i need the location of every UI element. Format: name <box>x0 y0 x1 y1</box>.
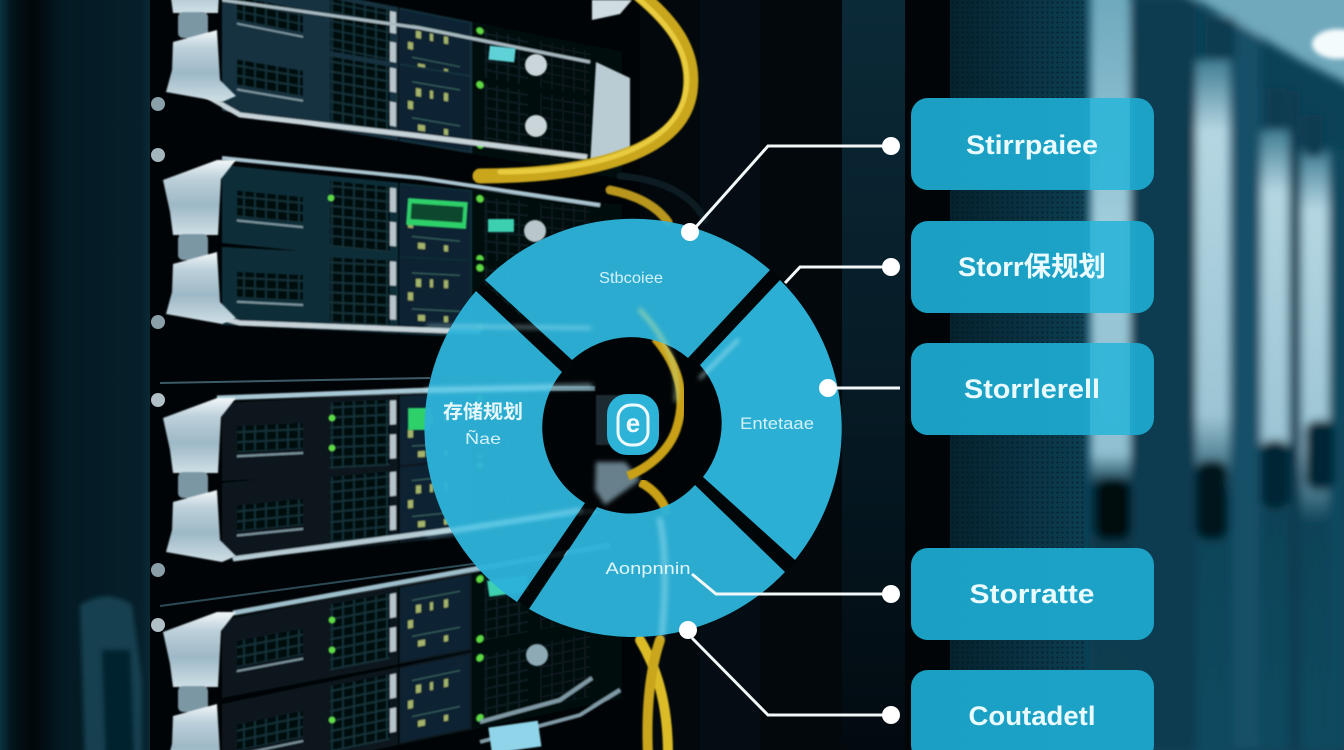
label box 3 <box>911 343 1154 435</box>
segment: top <box>485 219 770 360</box>
diagram: central segmented ring <box>424 219 842 637</box>
segment: bottom <box>529 485 785 637</box>
yellow network cables <box>480 0 705 750</box>
label box 5 <box>911 670 1154 750</box>
server units: light mounting brackets <box>163 0 632 750</box>
panel: blurred server aisle background <box>1086 0 1344 750</box>
server units: rack faces <box>205 0 622 750</box>
segment label: left chinese: 存储规划 <box>443 401 523 423</box>
label box 2: Storr保规划 <box>958 252 1106 282</box>
center icon: e <box>626 408 640 438</box>
connector 2 <box>785 267 891 283</box>
segment label: left small: Ñae <box>465 428 501 448</box>
center dark disc <box>540 334 724 518</box>
segment: left <box>424 291 585 602</box>
segment label: bottom: Aonpnnin <box>606 559 690 578</box>
connector 1 <box>695 146 891 228</box>
label box 1: Stirrpaiee <box>966 130 1098 160</box>
center icon <box>607 394 659 455</box>
label box 4 <box>911 548 1154 640</box>
segment label: top: Stbcoiee <box>599 270 663 287</box>
connector lines with nodes <box>692 146 900 715</box>
label box 1 <box>911 98 1154 190</box>
segment: right <box>700 280 842 560</box>
connector nodes <box>679 137 900 724</box>
connector 3 <box>828 386 900 390</box>
label box 2 <box>911 221 1154 313</box>
label box 3: Storrlerell <box>964 374 1100 404</box>
label box 5: Coutadetl <box>968 701 1096 731</box>
connector 5 <box>692 638 891 715</box>
panel: perforated mesh door <box>950 0 1092 750</box>
server units: status displays, LEDs and knobs <box>328 46 548 750</box>
panel: server rack column <box>150 0 640 750</box>
connector 4 <box>692 574 891 594</box>
center disc details: rack block and cable <box>545 338 681 515</box>
panel: dark left rack edge background <box>0 0 165 750</box>
gaps between ring segments <box>478 274 792 604</box>
panel: dark middle rack section <box>640 0 950 750</box>
segment label: right: Entetaae <box>740 414 814 433</box>
light streaks over ring <box>428 310 738 634</box>
label box 4: Storratte <box>970 579 1094 609</box>
